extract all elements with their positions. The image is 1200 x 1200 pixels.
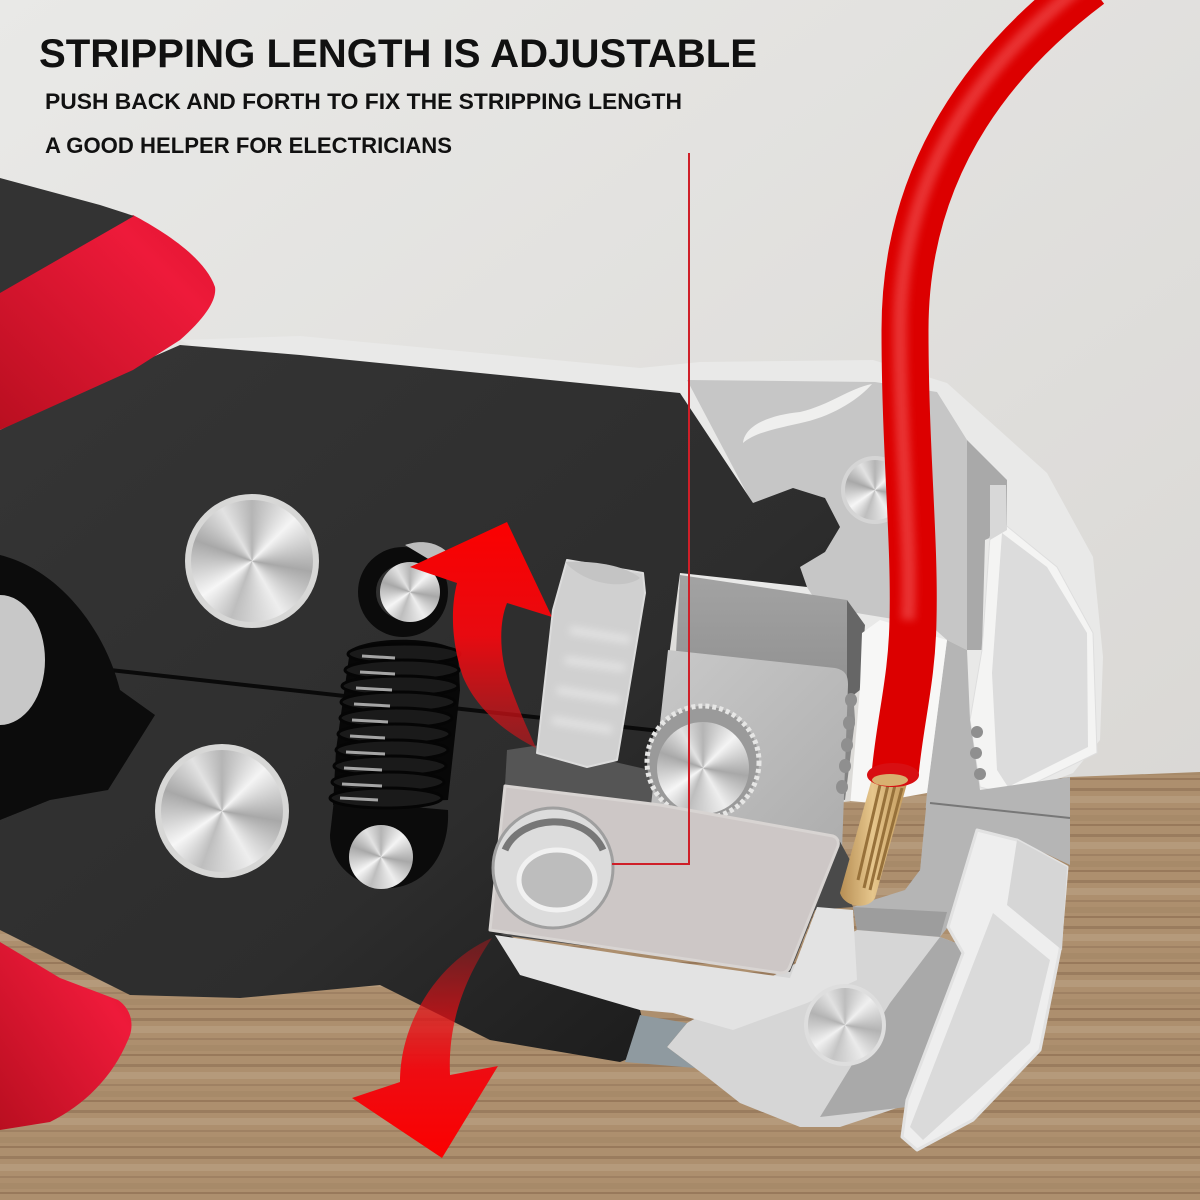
plier black body xyxy=(0,345,840,1062)
red callout line xyxy=(612,153,689,864)
rivet: lower xyxy=(155,744,289,878)
red grip upper xyxy=(0,215,215,430)
rivet: upper xyxy=(185,494,319,628)
adjuster block xyxy=(650,575,865,850)
lower rivet xyxy=(804,984,886,1066)
lower lever xyxy=(495,907,857,1030)
red grip lower xyxy=(0,942,132,1130)
red wire xyxy=(895,0,1090,775)
knurled knob xyxy=(647,706,759,818)
wood seen through slot xyxy=(843,801,926,890)
pivot bolt xyxy=(0,555,155,820)
black grip stripe upper xyxy=(0,178,134,293)
upper curved red arrow xyxy=(410,522,552,748)
plier upper jaw shell xyxy=(180,336,1103,797)
background: wall xyxy=(0,0,1200,900)
white wire slot xyxy=(850,620,947,807)
shadow under slider knob xyxy=(505,745,662,805)
centre seam xyxy=(110,670,660,731)
translucent slider knob xyxy=(537,560,645,767)
stranded copper conductor xyxy=(840,763,919,906)
title: STRIPPING LENGTH IS ADJUSTABLE xyxy=(39,32,757,76)
slot teeth xyxy=(836,693,986,794)
adjustment slider plate xyxy=(490,786,838,973)
dark gap beside plate xyxy=(500,838,853,972)
plate screw xyxy=(493,808,613,928)
bluish metal tip xyxy=(625,1015,695,1068)
spring xyxy=(330,542,460,889)
subtitle line 1: PUSH BACK AND FORTH TO FIX THE STRIPPING LENGTH xyxy=(45,89,682,114)
subtitle line 2: A GOOD HELPER FOR ELECTRICIANS xyxy=(45,133,452,158)
background: wooden table xyxy=(0,772,1200,1200)
lower curved red arrow xyxy=(352,938,498,1158)
plier lower jaw xyxy=(667,640,1070,1150)
